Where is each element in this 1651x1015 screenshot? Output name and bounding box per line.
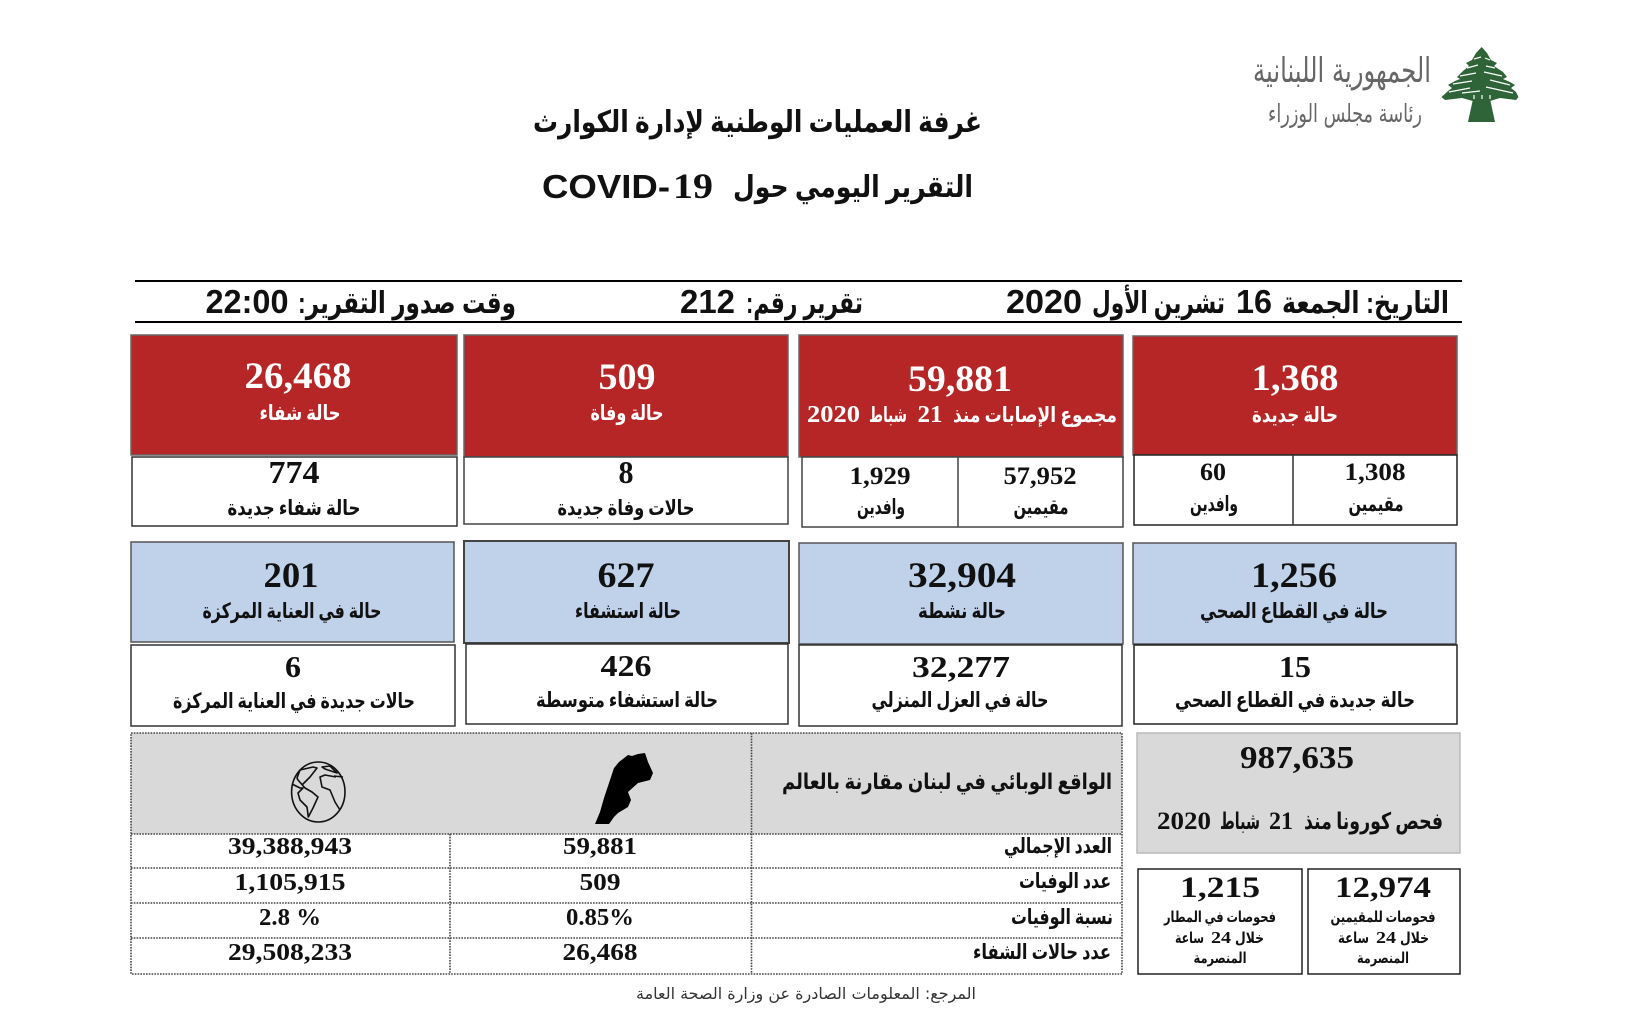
table heading: الواقع الوبائي في لبنان مقارنة بالعالم — [782, 769, 1112, 795]
panel: resident tests — [1308, 869, 1460, 974]
panel: active cases — [799, 543, 1123, 726]
panel: new cases: 1,308 — [1344, 459, 1406, 486]
panel: recoveries — [131, 335, 457, 526]
report time: 22:00 — [206, 283, 288, 320]
row: death rate: 2.8 % — [259, 905, 321, 931]
panel: ICU cases: حالة في العناية المركزة — [202, 599, 382, 623]
label: total cases since 21 February 2020: 2020 — [807, 402, 860, 428]
panel: health sector cases: 15 — [1279, 649, 1311, 684]
info bar: date, report number, time — [135, 280, 1462, 323]
panel: resident tests: المنصرمة — [1357, 951, 1409, 967]
panel: total cases: مقيمين — [1014, 495, 1068, 519]
panel: health sector cases: حالة جديدة في القطاع الصحي — [1175, 688, 1415, 712]
panel: new cases — [1133, 336, 1457, 525]
panel: recoveries: حالة شفاء — [260, 401, 340, 425]
panel: ICU cases: 6 — [285, 649, 301, 684]
title: operations room: غرفة العمليات الوطنية لإدارة الكوارث — [533, 106, 982, 139]
row: total: 39,388,943 — [228, 834, 352, 860]
panel: health sector cases: 1,256 — [1251, 555, 1337, 595]
panel: active cases: 32,904 — [908, 555, 1016, 595]
report number — [680, 283, 863, 321]
row: deaths: 1,105,915 — [234, 870, 346, 896]
calligraphy: Lebanese Republic: الجمهورية اللبنانية — [1253, 51, 1431, 91]
row: total — [228, 834, 1112, 860]
label: during 24 hours: خلال — [1400, 931, 1429, 947]
panel: hospitalised cases — [464, 541, 789, 724]
panel: total cases: 57,952 — [1004, 463, 1076, 490]
panel: airport tests — [1138, 869, 1302, 974]
label: PCR tests since 21 February 2020: فحص كورونا منذ — [1304, 809, 1443, 835]
icon: map of Lebanon — [595, 753, 653, 824]
report number: تقرير رقم: — [746, 287, 863, 321]
panel: total PCR tests: 987,635 — [1240, 739, 1354, 775]
date: 16 — [1236, 283, 1272, 320]
logo: Lebanese cedar and calligraphy — [1253, 47, 1518, 128]
panel: airport tests: فحوصات في المطار — [1163, 910, 1276, 926]
row: recoveries — [228, 940, 1111, 966]
date: تشرين الأول — [1092, 284, 1225, 321]
panel: total cases: وافدين — [857, 495, 905, 519]
row: recoveries: 29,508,233 — [228, 940, 352, 966]
source note: المرجع: المعلومات الصادرة عن وزارة الصحة العامة — [636, 984, 976, 1004]
report time: وقت صدور التقرير: — [298, 287, 516, 321]
panel: deaths: 509 — [598, 357, 656, 398]
table: Lebanon compared with the world — [131, 733, 1122, 974]
panel: active cases: 32,277 — [912, 649, 1010, 684]
row: total: 59,881 — [563, 834, 637, 860]
panel: ICU cases: 201 — [264, 555, 318, 595]
panel: new cases: مقيمين — [1348, 492, 1404, 516]
panel: hospitalised cases: حالة استشفاء متوسطة — [536, 688, 718, 712]
report number: 212 — [680, 283, 735, 320]
report time — [206, 283, 516, 321]
row: death rate: نسبة الوفيات — [1011, 905, 1113, 929]
row: recoveries: عدد حالات الشفاء — [973, 940, 1111, 964]
calligraphy: Presidency of the Council of Ministers: رئاسة مجلس الوزراء — [1268, 99, 1422, 128]
panel: deaths: 8 — [618, 454, 634, 490]
row: deaths: 509 — [580, 870, 620, 896]
panel: resident tests: 12,974 — [1335, 871, 1431, 904]
panel: active cases: حالة نشطة — [918, 599, 1006, 623]
label: PCR tests since 21 February 2020: شباط — [1220, 809, 1260, 834]
title: daily report on COVID-19 — [542, 166, 973, 206]
panel: deaths — [464, 335, 788, 524]
panel: health sector cases — [1133, 543, 1457, 724]
panel: airport tests: المنصرمة — [1194, 951, 1246, 967]
panel: health sector cases: حالة في القطاع الصحي — [1200, 599, 1388, 623]
panel: new cases: 60 — [1200, 459, 1226, 486]
panel: total cases: 59,881 — [908, 359, 1012, 400]
label: during 24 hours — [1175, 928, 1264, 947]
row: total: العدد الإجمالي — [1004, 834, 1112, 858]
panel: new cases: 1,368 — [1252, 358, 1338, 399]
label: PCR tests since 21 February 2020: 21 — [1269, 808, 1293, 835]
panel: new cases: وافدين — [1190, 492, 1238, 516]
row: recoveries: 26,468 — [562, 940, 638, 966]
date: 2020 — [1006, 283, 1082, 320]
label: total cases since 21 February 2020 — [807, 402, 1117, 428]
row: deaths: عدد الوفيات — [1019, 869, 1111, 893]
date — [1006, 283, 1449, 321]
title: daily report on COVID-19: 19 — [673, 166, 713, 206]
label: total cases since 21 February 2020: 21 — [918, 402, 942, 428]
panel: hospitalised cases: حالة استشفاء — [575, 599, 681, 623]
title: daily report on COVID-19: التقرير اليومي حول — [733, 171, 973, 205]
panel: ICU cases — [131, 542, 455, 726]
icon: globe — [292, 762, 345, 822]
row: death rate — [259, 905, 1113, 931]
label: during 24 hours: 24 — [1211, 928, 1232, 947]
label: PCR tests since 21 February 2020: 2020 — [1157, 808, 1211, 835]
panel: total cases — [799, 335, 1123, 527]
label: total cases since 21 February 2020: شباط — [869, 403, 907, 427]
panel: hospitalised cases: 426 — [600, 648, 652, 683]
icon: cedar tree — [1442, 47, 1518, 122]
panel: total cases: 1,929 — [850, 463, 910, 490]
panel: total PCR tests — [1137, 733, 1460, 853]
label: during 24 hours: ساعة — [1338, 931, 1369, 947]
panel: active cases: حالة في العزل المنزلي — [872, 688, 1048, 712]
row: death rate: 0.85% — [566, 905, 634, 931]
panel: hospitalised cases: 627 — [598, 555, 654, 595]
title: daily report on COVID-19: COVID- — [542, 168, 670, 205]
panel: recoveries: حالة شفاء جديدة — [228, 496, 360, 520]
panel: airport tests: 1,215 — [1180, 871, 1260, 904]
label: during 24 hours: خلال — [1235, 931, 1264, 947]
label: total cases since 21 February 2020: مجموع الإصابات منذ — [953, 403, 1117, 427]
panel: deaths: حالة وفاة — [590, 401, 664, 425]
panel: ICU cases: حالات جديدة في العناية المركزة — [173, 689, 415, 713]
panel: recoveries: 774 — [268, 454, 320, 490]
panel: new cases: حالة جديدة — [1252, 403, 1338, 427]
date: التاريخ: الجمعة — [1282, 287, 1449, 320]
row: deaths — [234, 869, 1111, 896]
label: PCR tests since 21 February 2020 — [1157, 808, 1443, 835]
panel: resident tests: فحوصات للمقيمين — [1330, 910, 1436, 926]
label: during 24 hours — [1338, 928, 1429, 947]
label: during 24 hours: 24 — [1376, 928, 1397, 947]
panel: recoveries: 26,468 — [244, 356, 352, 397]
label: during 24 hours: ساعة — [1175, 931, 1204, 947]
panel: deaths: حالات وفاة جديدة — [558, 496, 694, 520]
